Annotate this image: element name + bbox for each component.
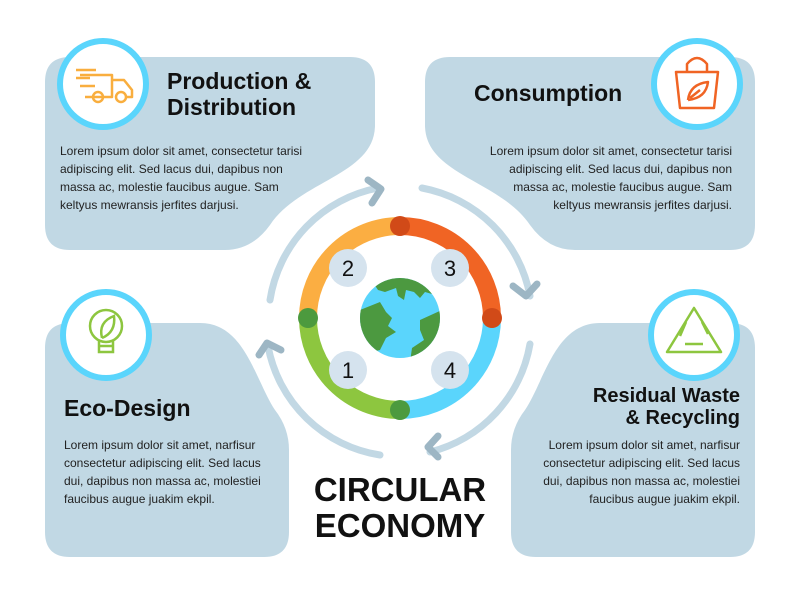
panel: eco-design [45, 323, 289, 557]
heading: production [167, 68, 311, 120]
heading: recycling: & Recycling [626, 407, 740, 429]
text: eco-design: consectetur adipiscing elit. Sed lacus [64, 456, 261, 470]
heading: production: Production & [167, 68, 311, 94]
panel: recycling [511, 323, 755, 557]
text: eco-design: faucibus augue juakim ekpil. [64, 492, 215, 506]
numbers: 3 [444, 256, 456, 281]
icon: bag [676, 58, 718, 108]
text: consumption: adipiscing elit. Sed lacus dui, dapibus non [509, 162, 732, 176]
text: eco-design [64, 438, 261, 506]
heading: eco-design: Eco-Design [64, 395, 191, 421]
text: production: Lorem ipsum dolor sit amet, consectetur tarisi [60, 144, 302, 158]
ring [308, 226, 492, 410]
text: recycling: Lorem ipsum dolor sit amet, narfisur [549, 438, 740, 452]
outer arrows [259, 180, 537, 457]
heading: production: Distribution [167, 94, 296, 120]
heading: consumption: Consumption [474, 80, 622, 106]
text: recycling: faucibus augue juakim ekpil. [589, 492, 740, 506]
text: production: keltyus mewransis jerfites darjusi. [60, 198, 239, 212]
text: production: massa ac, molestie faucibus augue. Sam [60, 180, 279, 194]
text: recycling: dui, dapibus non massa ac, molestiei [543, 474, 740, 488]
numbers [329, 249, 469, 389]
icon: bulb [90, 310, 122, 352]
text: consumption: keltyus mewransis jerfites darjusi. [553, 198, 732, 212]
text: recycling: consectetur adipiscing elit. Sed lacus [543, 456, 740, 470]
text: production [60, 144, 302, 212]
text: eco-design: Lorem ipsum dolor sit amet, narfisur [64, 438, 255, 452]
title: ECONOMY [315, 507, 485, 544]
numbers: 4 [444, 358, 456, 383]
background panels and diagram [45, 38, 755, 557]
text: consumption: massa ac, molestie faucibus augue. Sam [513, 180, 732, 194]
panel: production [45, 57, 375, 250]
text: consumption [490, 144, 732, 212]
globe [360, 278, 440, 358]
heading: recycling [593, 385, 740, 429]
title: CIRCULAR [314, 471, 486, 508]
title [314, 471, 486, 544]
icon: truck [76, 70, 132, 102]
panel: consumption [425, 57, 755, 250]
text: recycling [543, 438, 740, 506]
text: production: adipiscing elit. Sed lacus dui, dapibus non [60, 162, 283, 176]
numbers: 1 [342, 358, 354, 383]
heading: recycling: Residual Waste [593, 385, 740, 407]
icon circles [60, 41, 740, 378]
icon: recycle [667, 308, 721, 352]
text: eco-design: dui, dapibus non massa ac, molestiei [64, 474, 261, 488]
text: consumption: Lorem ipsum dolor sit amet, consectetur tarisi [490, 144, 732, 158]
numbers: 2 [342, 256, 354, 281]
